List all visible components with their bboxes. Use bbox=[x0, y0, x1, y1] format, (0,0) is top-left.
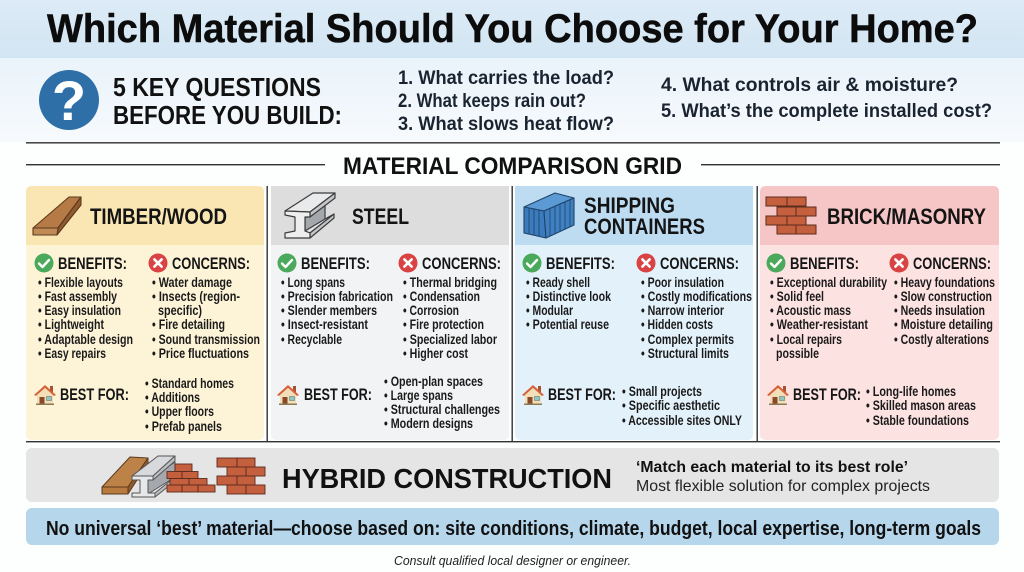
benefits heading: BENEFITS: bbox=[58, 255, 127, 273]
best for label: BEST FOR: bbox=[304, 386, 372, 404]
best for list: • Stable foundations bbox=[866, 413, 969, 428]
benefits list: • Flexible layouts bbox=[38, 275, 123, 290]
panel: 5 key questions bbox=[0, 58, 1024, 142]
benefits heading bbox=[522, 254, 615, 273]
benefits list bbox=[38, 275, 133, 361]
benefits list: • Easy repairs bbox=[38, 346, 106, 361]
benefits heading bbox=[766, 254, 859, 273]
best for label bbox=[767, 385, 861, 405]
best for label: BEST FOR: bbox=[793, 386, 861, 404]
benefits list: • Precision fabrication bbox=[281, 289, 393, 304]
icon: steel I-beam bbox=[285, 193, 335, 238]
best for list: • Accessible sites ONLY bbox=[622, 413, 742, 428]
concerns list bbox=[403, 275, 498, 361]
best for list: • Structural challenges bbox=[384, 402, 500, 417]
questions 4 and 5: 4. What controls air & moisture? bbox=[661, 74, 958, 96]
hybrid tagline bbox=[636, 459, 930, 495]
benefits list: possible bbox=[776, 346, 819, 361]
questions 1 to 3 bbox=[398, 67, 614, 135]
concerns list: • Higher cost bbox=[403, 346, 468, 361]
concerns heading bbox=[890, 254, 991, 273]
heading: shipping containers: SHIPPING bbox=[584, 193, 675, 218]
best for list: • Modern designs bbox=[384, 416, 473, 431]
best for label bbox=[34, 385, 129, 405]
concerns list: • Insects (region- bbox=[152, 289, 240, 304]
benefits list: • Modular bbox=[526, 303, 574, 318]
benefits heading: BENEFITS: bbox=[301, 255, 370, 273]
heading: hybrid construction: HYBRID CONSTRUCTION bbox=[282, 463, 612, 494]
panel: steel bbox=[271, 186, 509, 440]
best for list: • Small projects bbox=[622, 384, 702, 399]
benefits list bbox=[770, 275, 887, 361]
concerns list: • Poor insulation bbox=[641, 275, 724, 290]
benefits list: • Fast assembly bbox=[38, 289, 117, 304]
benefits heading bbox=[278, 254, 370, 273]
benefits heading bbox=[34, 254, 127, 273]
concerns list: • Slow construction bbox=[894, 289, 992, 304]
hybrid tagline: ‘Match each material to its best role’ bbox=[636, 459, 908, 476]
concerns list: specific) bbox=[158, 303, 202, 318]
icon: mixed materials bbox=[102, 456, 265, 497]
concerns list: • Thermal bridging bbox=[403, 275, 497, 290]
benefits list: • Acoustic mass bbox=[770, 303, 851, 318]
benefits list: • Local repairs bbox=[770, 332, 842, 347]
concerns list: • Heavy foundations bbox=[894, 275, 995, 290]
hybrid tagline: Most flexible solution for complex projects bbox=[636, 478, 930, 495]
benefits list: • Ready shell bbox=[526, 275, 590, 290]
benefits heading: BENEFITS: bbox=[790, 255, 859, 273]
best for list bbox=[866, 384, 976, 428]
concerns heading: CONCERNS: bbox=[660, 255, 739, 273]
benefits list bbox=[281, 275, 393, 347]
best for label: BEST FOR: bbox=[548, 386, 616, 404]
benefits list: • Adaptable design bbox=[38, 332, 133, 347]
panel: timber/wood bbox=[26, 186, 264, 440]
heading: material comparison grid: MATERIAL COMPARISON GRID bbox=[343, 153, 682, 180]
concerns list: • Price fluctuations bbox=[152, 346, 249, 361]
heading: steel: STEEL bbox=[352, 204, 409, 229]
concerns list: • Complex permits bbox=[641, 332, 734, 347]
footer note: Consult qualified local designer or engineer. bbox=[394, 553, 631, 568]
concerns list: • Specialized labor bbox=[403, 332, 498, 347]
benefits list: • Solid feel bbox=[770, 289, 824, 304]
concerns heading bbox=[636, 254, 739, 273]
icon: question mark bbox=[39, 69, 99, 132]
icon: brick wall bbox=[766, 197, 816, 234]
best for label bbox=[522, 385, 616, 405]
concerns list bbox=[894, 275, 995, 347]
concerns list bbox=[641, 275, 752, 361]
concerns heading bbox=[148, 254, 250, 273]
best for list bbox=[145, 376, 234, 434]
concerns heading bbox=[398, 254, 501, 273]
concerns list: • Costly modifications bbox=[641, 289, 752, 304]
concerns list: • Moisture detailing bbox=[894, 317, 993, 332]
concerns heading: CONCERNS: bbox=[422, 255, 501, 273]
icon: shipping container bbox=[524, 193, 574, 238]
best for label bbox=[277, 385, 372, 405]
concerns list: • Water damage bbox=[152, 275, 232, 290]
concerns list: • Corrosion bbox=[403, 303, 459, 318]
benefits list: • Recyclable bbox=[281, 332, 342, 347]
best for list: • Large spans bbox=[384, 388, 453, 403]
benefits list: • Long spans bbox=[281, 275, 345, 290]
questions 4 and 5: 5. What’s the complete installed cost? bbox=[661, 100, 992, 122]
benefits list: • Insect-resistant bbox=[281, 317, 368, 332]
questions 1 to 3: 3. What slows heat flow? bbox=[398, 113, 614, 135]
concerns list: • Needs insulation bbox=[894, 303, 985, 318]
concerns heading: CONCERNS: bbox=[172, 255, 250, 273]
concerns list: • Structural limits bbox=[641, 346, 729, 361]
best for list: • Additions bbox=[145, 390, 200, 405]
questions 1 to 3: 1. What carries the load? bbox=[398, 67, 614, 89]
concerns list bbox=[152, 275, 260, 361]
concerns list: • Costly alterations bbox=[894, 332, 989, 347]
heading: 5 key questions: 5 KEY QUESTIONS bbox=[113, 72, 321, 102]
benefits list: • Potential reuse bbox=[526, 317, 609, 332]
best for list: • Prefab panels bbox=[145, 419, 222, 434]
questions 1 to 3: 2. What keeps rain out? bbox=[398, 90, 586, 112]
best for list: • Open-plan spaces bbox=[384, 374, 483, 389]
title banner: Which Material Should You Choose for Your Home? bbox=[47, 7, 978, 51]
benefits list: • Easy insulation bbox=[38, 303, 121, 318]
panel: shipping containers bbox=[515, 186, 753, 440]
concerns list: • Hidden costs bbox=[641, 317, 713, 332]
questions 4 and 5 bbox=[661, 74, 992, 122]
best for label: BEST FOR: bbox=[60, 386, 129, 404]
heading: timber/wood: TIMBER/WOOD bbox=[90, 204, 227, 229]
panel: hybrid construction bbox=[26, 448, 999, 502]
icon: wood plank bbox=[33, 197, 81, 235]
best for list: • Long-life homes bbox=[866, 384, 956, 399]
concerns list: • Narrow interior bbox=[641, 303, 725, 318]
concerns heading: CONCERNS: bbox=[913, 255, 991, 273]
benefits list bbox=[526, 275, 611, 332]
heading: 5 key questions: BEFORE YOU BUILD: bbox=[113, 100, 342, 130]
concerns list: • Sound transmission bbox=[152, 332, 260, 347]
benefits list: • Slender members bbox=[281, 303, 377, 318]
best for list bbox=[384, 374, 500, 431]
heading: 5 key questions bbox=[113, 72, 342, 130]
best for list: • Standard homes bbox=[145, 376, 234, 391]
icon: question mark: ? bbox=[52, 69, 86, 132]
best for list bbox=[622, 384, 742, 428]
best for list: • Specific aesthetic bbox=[622, 398, 720, 413]
benefits list: • Distinctive look bbox=[526, 289, 611, 304]
heading: brick/masonry: BRICK/MASONRY bbox=[827, 204, 986, 229]
concerns list: • Fire detailing bbox=[152, 317, 225, 332]
best for list: • Upper floors bbox=[145, 404, 214, 419]
concerns list: • Fire protection bbox=[403, 317, 484, 332]
benefits list: • Weather-resistant bbox=[770, 317, 868, 332]
best for list: • Skilled mason areas bbox=[866, 398, 976, 413]
benefits list: • Lightweight bbox=[38, 317, 104, 332]
benefits heading: BENEFITS: bbox=[546, 255, 615, 273]
benefits list: • Exceptional durability bbox=[770, 275, 887, 290]
callout: no universal best material bbox=[26, 508, 999, 545]
heading: shipping containers: CONTAINERS bbox=[584, 214, 705, 239]
heading: shipping containers bbox=[584, 193, 705, 239]
concerns list: • Condensation bbox=[403, 289, 480, 304]
panel: brick/masonry bbox=[760, 186, 999, 440]
